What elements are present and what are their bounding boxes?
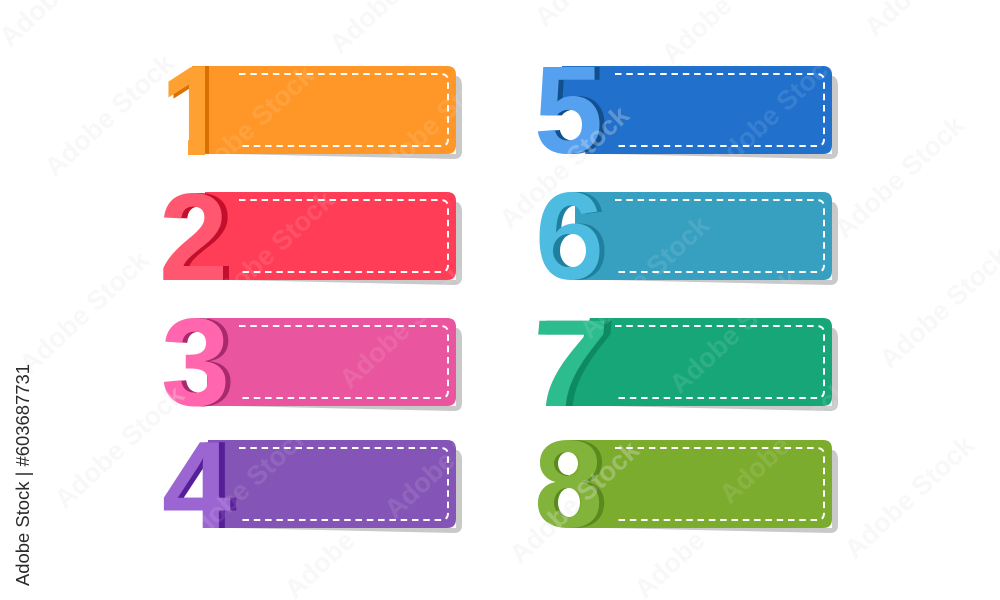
watermark: Adobe Stock [364,54,505,189]
digit 3: 3 [166,294,235,432]
digit 6: 6 [535,168,604,306]
watermark: Adobe Stock [574,209,715,344]
card 8 [570,440,832,528]
watermark: Adobe Stock [174,419,315,554]
watermark: Adobe Stock [14,244,155,379]
watermark: Adobe Stock [494,99,635,234]
digit 7: 7 [524,294,613,432]
banner 1: orange [168,66,462,159]
stitched outline 3 [239,326,448,398]
watermark: Adobe Stock [714,374,855,509]
card 1 [192,66,456,154]
banner 2: red [159,169,462,307]
card 5 [562,66,832,154]
card 6 [575,192,832,280]
stitched outline 4 [239,448,448,520]
digit 2: 2 [159,169,228,307]
digit 4: 4 [162,417,231,555]
card 2 [178,192,456,280]
stitched outline 7 [615,326,824,398]
banner 7: green [524,294,838,432]
stitched outline 6 [615,200,824,272]
watermark: Adobe Stock [829,109,970,244]
digit 7: 7 [531,294,620,432]
digit 1: 1 [165,46,234,184]
watermark: Adobe Stock [49,379,190,514]
digit 4: 4 [168,417,237,555]
banner 4: purple [162,417,462,555]
stitched outline 1 [239,74,448,146]
watermark: Adobe Stock [664,264,805,399]
banner 5: blue [534,42,838,180]
watermark: Adobe Stock [379,389,520,524]
watermark: Adobe Stock [504,434,645,569]
digit 8: 8 [539,416,608,554]
watermark: Adobe Stock [704,44,845,179]
banner 3: pink [161,294,462,432]
stitched outline 8 [615,448,824,520]
watermark: Adobe Stock [839,429,980,564]
watermark: Adobe Stock [334,259,475,394]
digit 5: 5 [539,42,608,180]
stitched outline 2 [239,200,448,272]
digit 8: 8 [534,416,603,554]
banner 8: lime green [534,416,838,554]
side credit text: Adobe Stock | #603687731 [13,364,33,586]
stitched outline 5 [615,74,824,146]
digit 5: 5 [534,42,603,180]
card 4 [208,440,456,528]
digit 6: 6 [540,168,609,306]
watermark: Adobe Stock [39,47,180,182]
card 3 [207,318,456,406]
watermark: Adobe Stock [179,59,320,194]
digit 3: 3 [161,294,230,432]
digit 2: 2 [165,169,234,307]
card 7 [560,318,832,406]
digit 1: 1 [161,43,230,181]
banner 6: teal [535,168,838,306]
watermark: Adobe Stock [199,184,340,319]
digit 1 [168,66,209,155]
